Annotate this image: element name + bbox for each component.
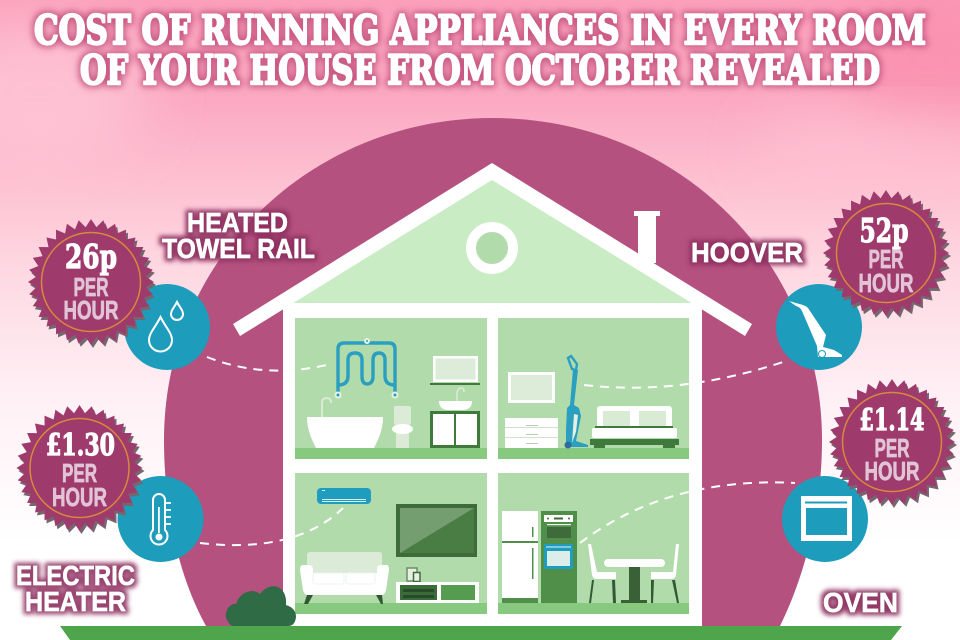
house [233,163,752,626]
icon: hoover [776,284,862,370]
badge: 52p per hour: HOUR [858,268,914,298]
badge: £1.14 per hour: £1.14 [860,403,924,438]
room: bathroom [295,318,487,459]
toilet [392,406,413,448]
badge: £1.14 per hour: HOUR [864,456,920,486]
vacuum [564,356,588,448]
oven unit [541,511,577,603]
wall picture [508,372,555,403]
dashed connector: oven [580,482,795,543]
badge: £1.30 per hour: HOUR [52,482,107,512]
chimney [634,211,660,263]
photo frames [407,568,420,582]
label: oven: OVEN [823,587,898,618]
badge: £1.14 per hour [829,379,957,508]
badge: £1.30 per hour [16,405,144,534]
roof outline [233,163,752,336]
dashed connector: towel rail [207,357,331,371]
label: electric heater [16,560,135,617]
room: living room [295,473,487,614]
chest of drawers [505,418,558,448]
icon: water drops [124,284,210,370]
dashed connector: hoover [584,362,783,388]
roof interior [285,176,700,304]
badge: 52p per hour [823,190,951,319]
bush [226,586,296,626]
badge: £1.14 per hour: PER [874,433,910,463]
sofa [300,552,389,604]
bed [590,406,679,448]
badge: 52p per hour: 52p [860,211,908,250]
label: electric heater: ELECTRIC [16,560,135,591]
sink and cabinet [430,388,480,448]
dining table and chairs [588,544,679,603]
label: heated towel rail [162,207,315,264]
tv stand [396,582,479,603]
fridge freezer [502,511,538,603]
dashed connector: heater [200,508,343,545]
label: hoover: HOOVER [691,237,803,268]
room: bedroom [498,318,689,459]
attic window [471,227,513,269]
heated towel rail [336,339,398,398]
label: heated towel rail: HEATED [187,207,288,238]
title [34,7,926,94]
bath [307,398,383,448]
label: heated towel rail: TOWEL RAIL [162,233,315,264]
backdrop circle [164,118,822,626]
badge: £1.30 per hour: £1.30 [46,428,115,463]
badge: £1.30 per hour: PER [62,458,97,488]
badge: 26p per hour [28,219,156,348]
icon: oven [782,476,868,562]
room: kitchen [498,473,689,614]
mirror and shelf [430,356,480,385]
badge: 52p per hour: PER [868,244,904,274]
house walls [283,303,702,626]
television [396,504,477,557]
badge: 26p per hour: PER [74,272,109,302]
icon: thermometer [118,476,204,562]
badge: 26p per hour: 26p [65,237,117,276]
air conditioner heater [317,488,371,504]
badge: 26p per hour: HOUR [64,295,119,325]
ground [60,626,902,640]
label: electric heater: HEATER [25,586,126,617]
